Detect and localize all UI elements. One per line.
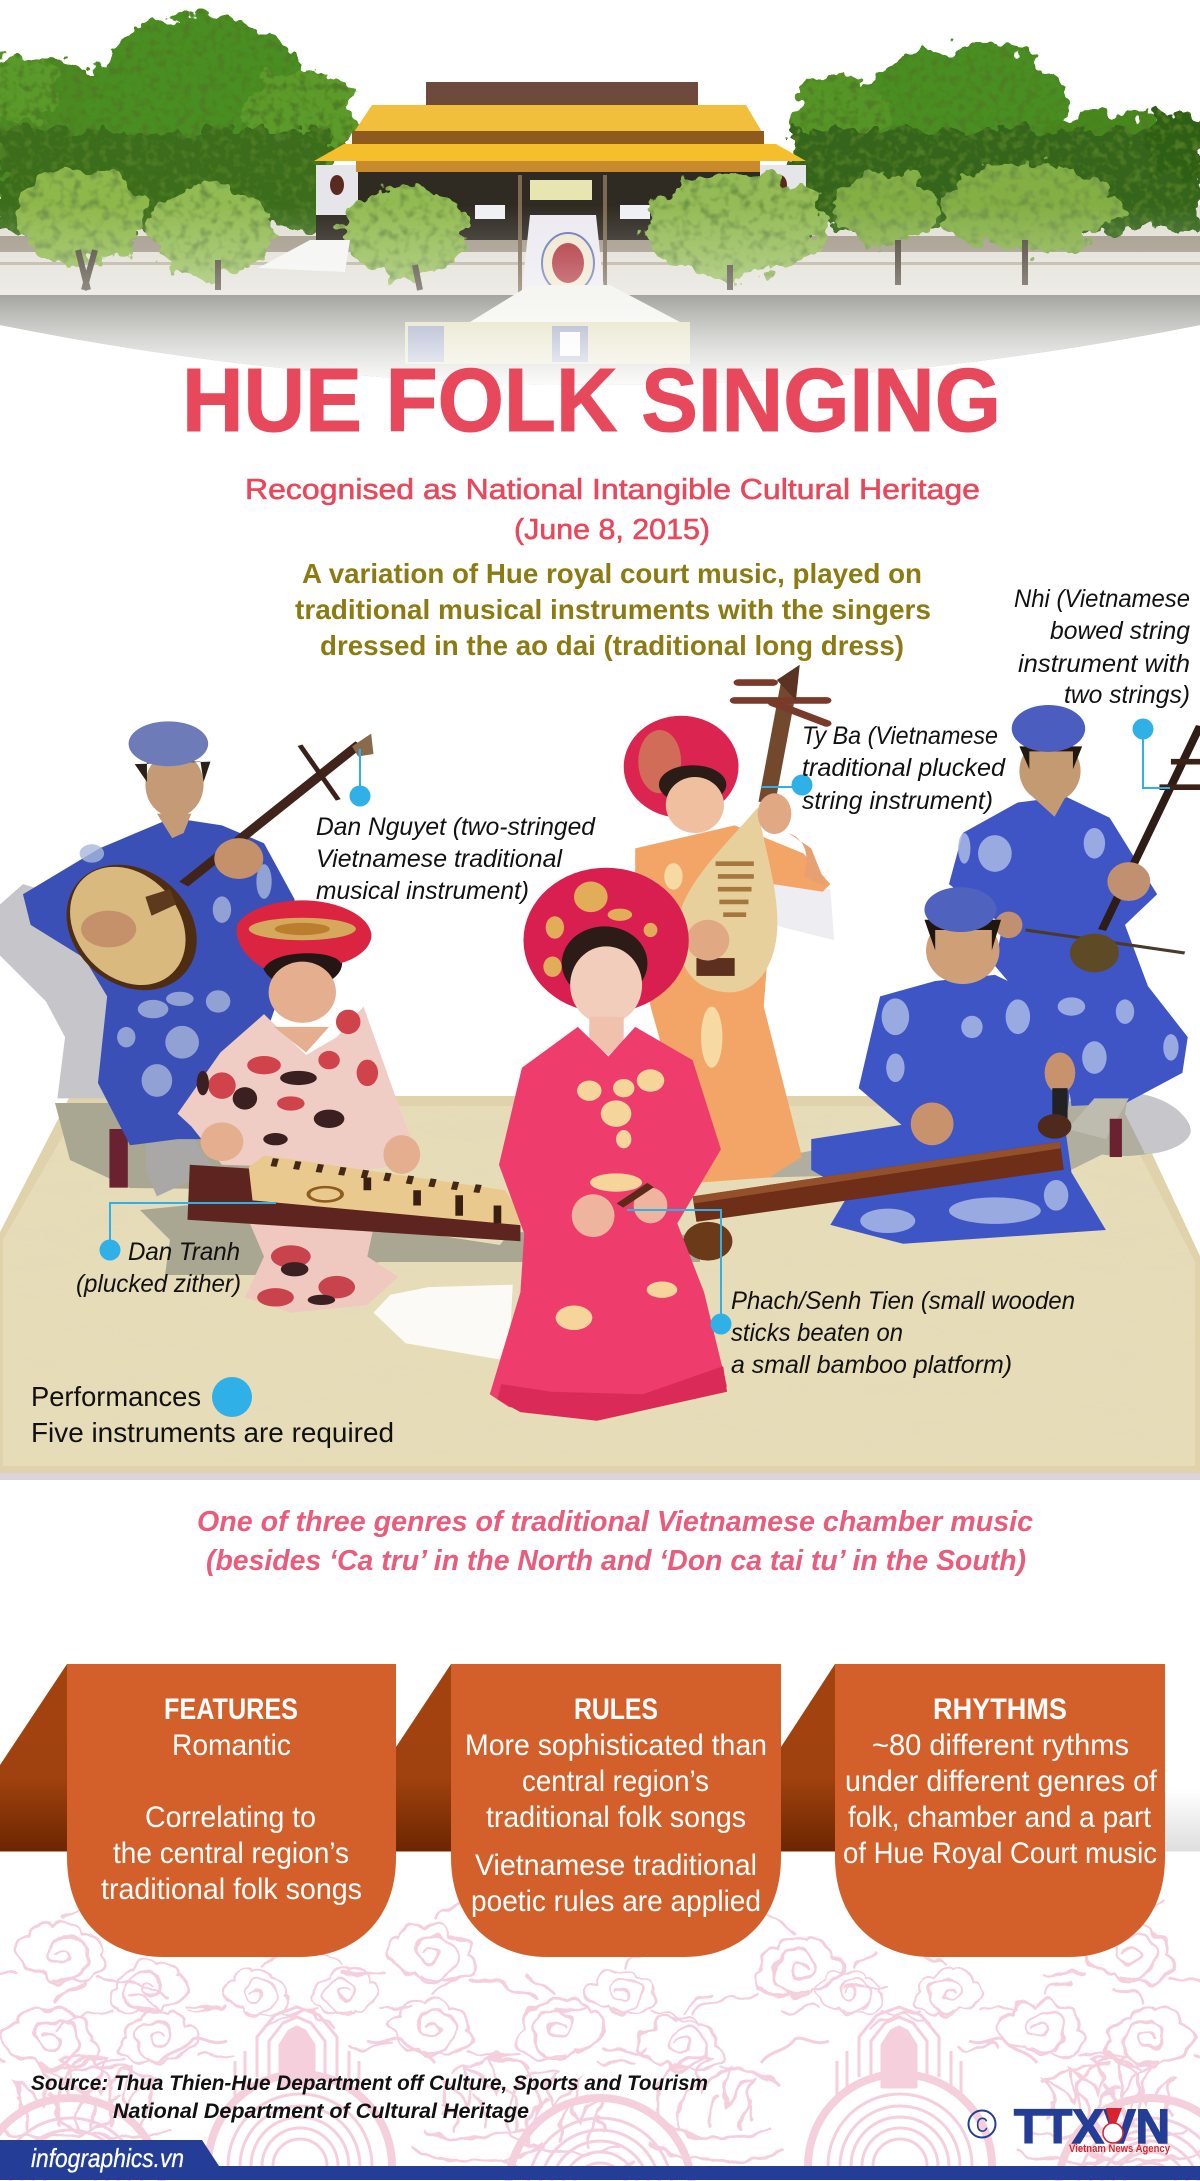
panel: rules: central region’s bbox=[522, 1765, 709, 1798]
carpet bbox=[0, 1096, 1200, 1480]
callout: Dan Tranh: Dan Tranh bbox=[128, 1238, 240, 1266]
callout: Nhi: Nhi (Vietnamese bbox=[1014, 585, 1190, 613]
description text: traditional musical instruments with the singers bbox=[295, 594, 931, 625]
source note bbox=[31, 2072, 708, 2123]
callout: Dan Nguyet bbox=[316, 749, 596, 905]
performers scene bbox=[0, 585, 1200, 1480]
panel: rhythms bbox=[781, 1664, 1200, 1957]
subtitle: recognition bbox=[245, 474, 980, 546]
callout: Ty Ba: traditional plucked bbox=[802, 754, 1006, 782]
subtitle: recognition: (June 8, 2015) bbox=[514, 514, 710, 546]
callout: Dan Nguyet: Vietnamese traditional bbox=[316, 845, 563, 873]
panel: rules: More sophisticated than bbox=[465, 1729, 767, 1762]
description text: dressed in the ao dai (traditional long dress) bbox=[320, 630, 904, 661]
lead singer in pink bbox=[490, 868, 732, 1421]
panel: rhythms: under different genres of bbox=[845, 1765, 1158, 1798]
subtitle: recognition: Recognised as National Intangible Cultural Heritage bbox=[245, 474, 980, 506]
trees: left cluster bbox=[0, 15, 355, 230]
panel: rhythms: of Hue Royal Court music bbox=[843, 1837, 1157, 1870]
footer bar with site name: infographics.vn bbox=[31, 2143, 184, 2173]
callout: Dan Tranh bbox=[76, 1203, 276, 1298]
genre statement bbox=[197, 1506, 1033, 1577]
callout: Nhi bbox=[1014, 585, 1190, 788]
callout: Nhi: instrument with bbox=[1018, 650, 1190, 678]
panel: rules: RULES bbox=[574, 1693, 658, 1726]
panel: features: FEATURES bbox=[164, 1693, 298, 1726]
logo: TTXVN: C bbox=[976, 2114, 988, 2137]
panel: rules bbox=[396, 1664, 781, 1957]
callout: Nhi: bowed string bbox=[1050, 617, 1190, 645]
header photo: Hue palace with trees bbox=[0, 15, 1200, 405]
panel: features: the central region’s bbox=[113, 1837, 349, 1870]
panel: rhythms: folk, chamber and a part bbox=[848, 1801, 1152, 1834]
low trees in front of palace bbox=[14, 164, 1120, 279]
callout: Dan Nguyet: Dan Nguyet (two-stringed bbox=[316, 813, 596, 841]
panel: rhythms: RHYTHMS bbox=[933, 1693, 1067, 1726]
source note: Source: Thua Thien-Hue Department off Culture, Sports and Tourism bbox=[31, 2072, 708, 2095]
man with Dan Nguyet bbox=[23, 721, 373, 1196]
callout: Nhi: two strings) bbox=[1064, 681, 1190, 709]
man front right with long zither bbox=[693, 887, 1106, 1244]
genre statement: One of three genres of traditional Vietnamese chamber music bbox=[197, 1506, 1033, 1538]
tree trunks bbox=[78, 240, 1025, 290]
callout: Ty Ba: Ty Ba (Vietnamese bbox=[802, 722, 998, 750]
source note: National Department of Cultural Heritage bbox=[113, 2100, 529, 2123]
performances note bbox=[31, 1377, 394, 1448]
decorative pink cloud and wave pattern bbox=[0, 1902, 1200, 2181]
palace bbox=[314, 82, 806, 240]
decorative: water reflection bbox=[0, 295, 1200, 385]
woman in floral dress with Dan Tranh bbox=[178, 900, 528, 1361]
logo: TTXVN: Vietnam News Agency bbox=[1069, 2143, 1171, 2155]
panel: rules: traditional folk songs bbox=[486, 1801, 746, 1834]
callout: Phach / Senh Tien bbox=[627, 1210, 1075, 1379]
woman in orange with Ty Ba bbox=[624, 665, 830, 1183]
footer bar with site name bbox=[0, 2140, 1200, 2180]
genre statement: (besides ‘Ca tru’ in the North and ‘Don ca tai tu’ in the South) bbox=[206, 1545, 1026, 1577]
callout: Dan Tranh: (plucked zither) bbox=[76, 1270, 241, 1298]
man with Nhi, back right bbox=[949, 705, 1200, 1157]
central monument bbox=[258, 175, 690, 364]
title: HUE FOLK SINGING bbox=[182, 351, 1001, 451]
panel: rules: poetic rules are applied bbox=[471, 1885, 761, 1918]
panel: rules: Vietnamese traditional bbox=[475, 1849, 757, 1882]
panel: features: traditional folk songs bbox=[101, 1873, 362, 1906]
callout: Dan Nguyet: musical instrument) bbox=[316, 877, 529, 905]
logo: TTXVN: TTXVN bbox=[1014, 2101, 1170, 2154]
panel: rhythms: ~80 different rythms bbox=[872, 1729, 1129, 1762]
callout: Phach / Senh Tien: sticks beaten on bbox=[731, 1319, 903, 1347]
terrace bbox=[0, 205, 1200, 295]
callout: Phach / Senh Tien: Phach/Senh Tien (small wooden bbox=[731, 1287, 1075, 1315]
panel: features bbox=[0, 1664, 396, 1957]
trees: right cluster bbox=[790, 45, 1200, 230]
performances note: Performances bbox=[31, 1381, 201, 1412]
gray shadow on carpet bbox=[55, 1103, 700, 1275]
gray backdrop shadows bbox=[0, 879, 1191, 1177]
description text: A variation of Hue royal court music, played on bbox=[302, 558, 922, 589]
description text bbox=[295, 558, 931, 661]
panel: features: Correlating to bbox=[145, 1801, 316, 1834]
panel: features: Romantic bbox=[172, 1729, 291, 1762]
performances note: Five instruments are required bbox=[31, 1417, 394, 1448]
callout: Phach / Senh Tien: a small bamboo platform) bbox=[731, 1351, 1012, 1379]
decorative: fade over photo bbox=[0, 214, 1200, 385]
callout: Ty Ba bbox=[761, 722, 1006, 815]
callout: Ty Ba: string instrument) bbox=[802, 787, 993, 815]
